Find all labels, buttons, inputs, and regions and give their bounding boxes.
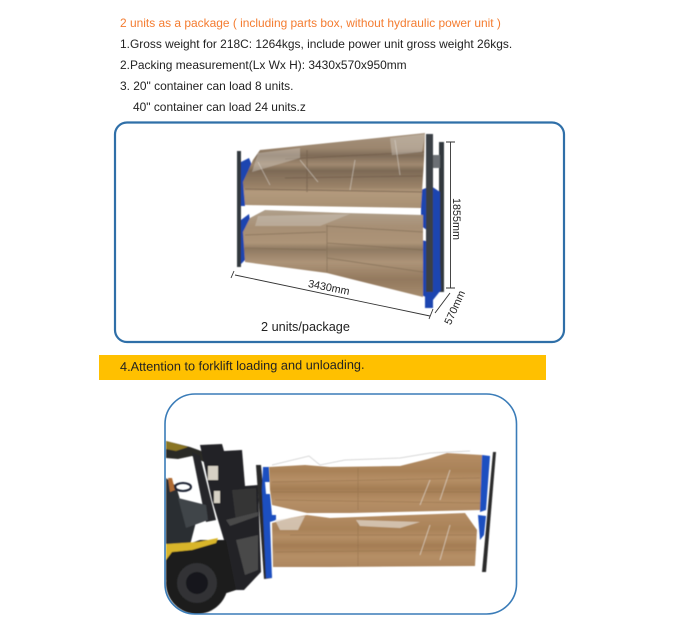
load: packed units [269,451,496,572]
front right post [426,134,433,300]
lower bale [272,513,477,567]
lower bale stripes [275,520,476,566]
dimension: height 1855mm: 1855mm [450,198,462,240]
front wheel [166,580,227,614]
lower bale folds [245,225,423,272]
gross weight line: 1.Gross weight for 218C: 1264kgs, include power unit gross weight 26kgs. [120,37,512,51]
forklift [166,441,276,614]
orange heading: 2 units as a package ( including parts box, without hydraulic power unit ) [120,16,501,30]
caption: 2 units/package: 2 units/package [261,320,350,334]
40 inch container line: 40" container can load 24 units.z [133,100,306,114]
upper bale folds [245,150,424,192]
dimension: length 3430mm [231,271,433,319]
text block: package specifications [120,16,512,114]
operator and seat [166,478,196,552]
chassis body [166,540,236,600]
rear grey block [432,155,440,168]
banner: forklift attention: 4.Attention to forklift loading and unloading. [120,357,365,374]
packing measurement line: 2.Packing measurement(Lx Wx H): 3430x570x950mm [120,58,407,72]
photo: packed units on rack [237,133,444,308]
banner: forklift attention [99,355,546,380]
fork carriage plate [256,465,272,579]
upper bale [243,133,425,208]
dimension: length 3430mm: 3430mm [307,278,351,298]
mast [200,444,261,590]
blue clamp [262,467,276,578]
steering wheel [175,483,191,491]
right black post [482,452,496,572]
panel: package dimensions [115,122,564,342]
rear right post [439,142,444,292]
blue rack ends [241,158,441,300]
plastic film [272,451,470,465]
dimension: height 1855mm [446,142,462,288]
dimension: width 570mm: 570mm [442,289,468,327]
upper bale stripes [272,468,480,510]
lower bale [243,210,423,297]
upper bale [269,453,482,513]
panel: forklift photo [165,394,516,614]
right blue end [478,455,490,540]
overhead guard and pillar [166,441,204,462]
yellow body strip [166,538,218,560]
left post [237,151,241,267]
20 inch container line: 3. 20" container can load 8 units. [120,79,293,93]
panel border [165,394,516,614]
